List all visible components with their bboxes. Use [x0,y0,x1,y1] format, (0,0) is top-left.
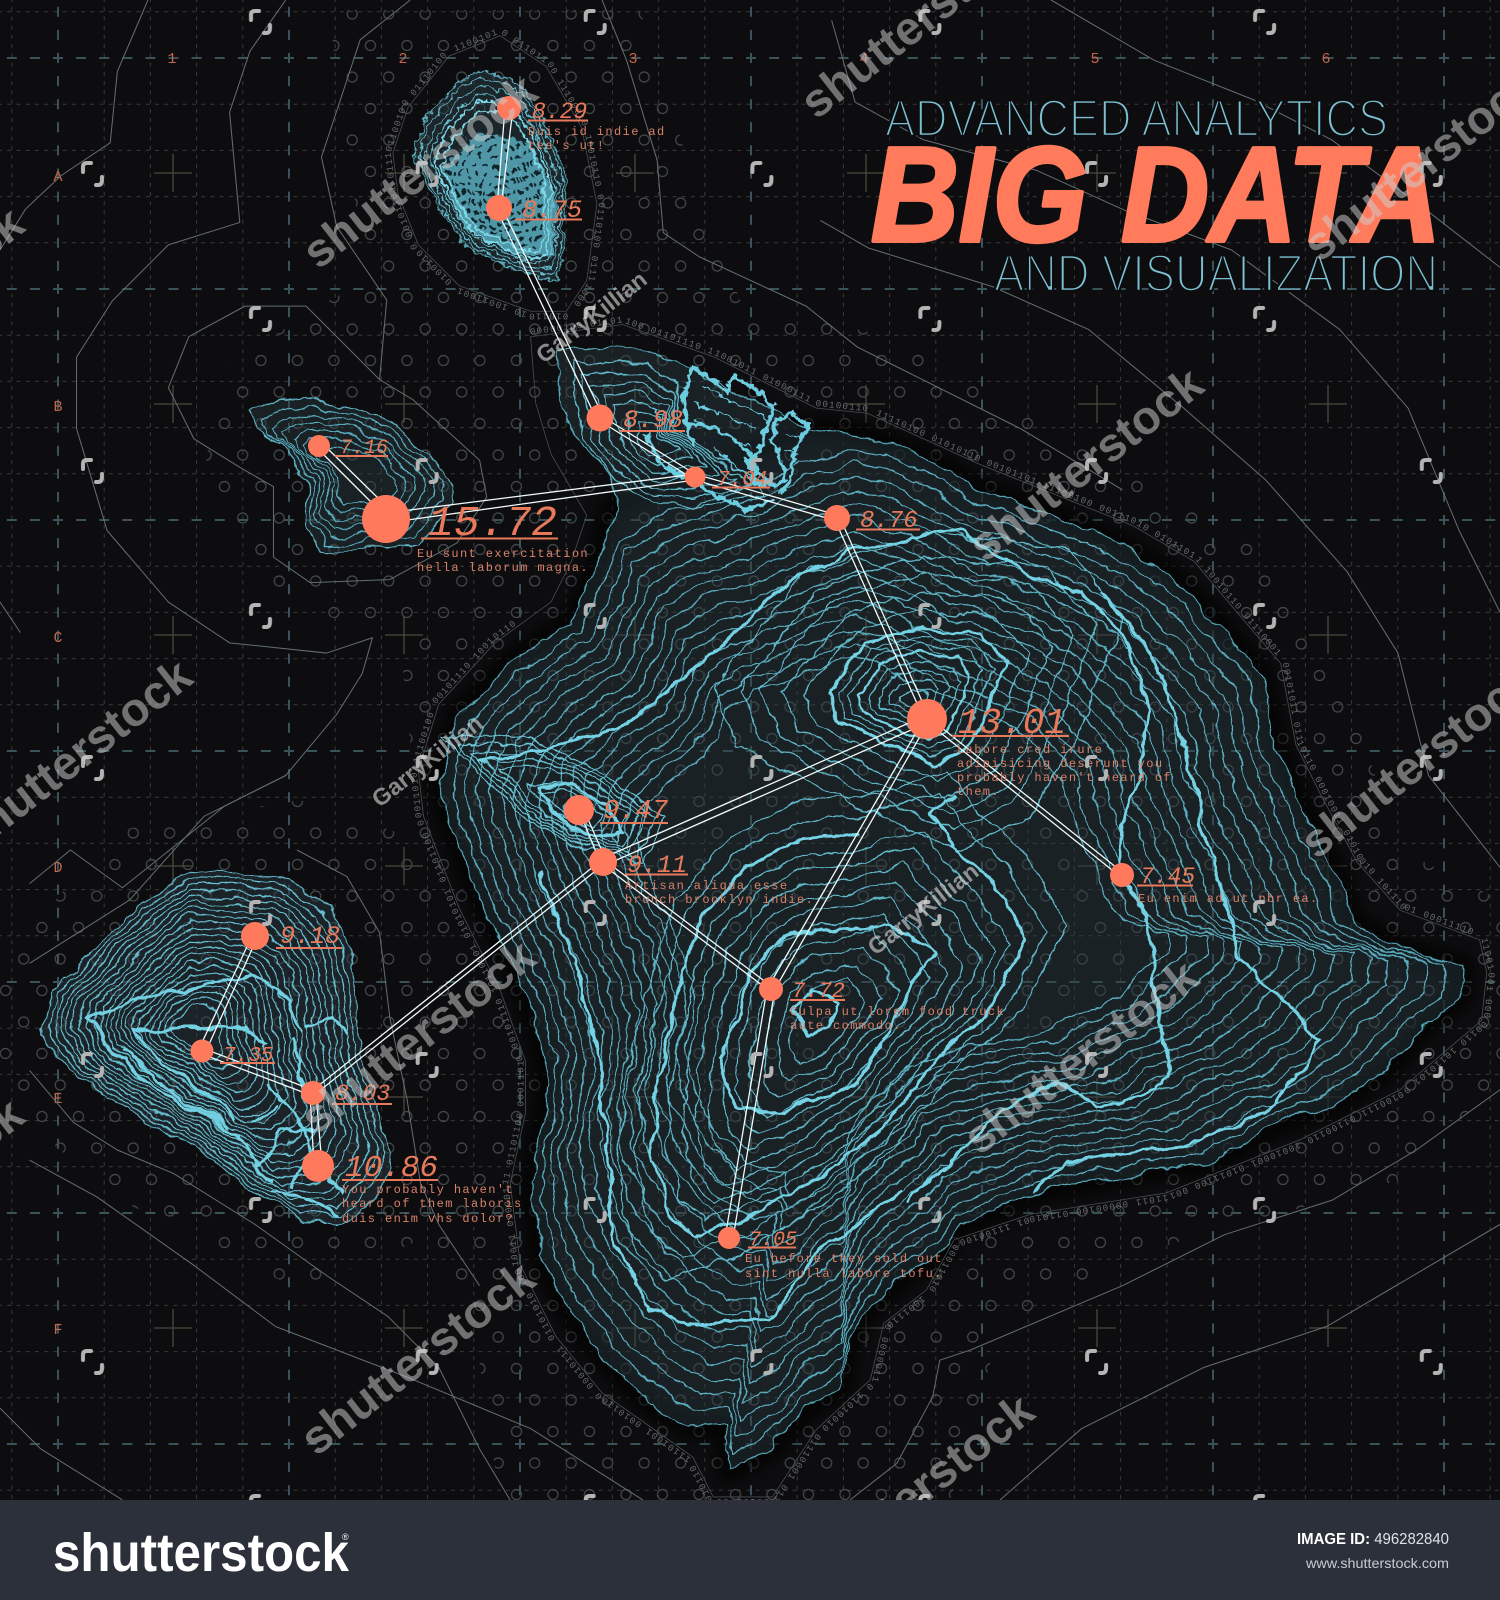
coast-parallel contours [451,448,1444,1453]
summit contours near 13.01 [714,535,1124,852]
north island landmass [413,70,567,280]
label 8.98: 8.98 [623,406,683,435]
label 15.72 [417,499,589,575]
axis labels: rows: C [53,630,63,647]
north island dark flecks [446,117,542,247]
label 8.75: 8.75 [522,196,582,225]
label 9.11: 9.11 [627,851,687,880]
label 7.16: 7.16 [340,437,388,460]
label 7.05: sint nulla labore tofu. [745,1267,943,1281]
watermarks: shutterstock [954,949,1208,1164]
label 7.45 [1137,864,1319,906]
label 7.04: 7.04 [717,469,767,492]
label 7.35: 7.35 [223,1045,274,1068]
watermarks: GarryKillian [367,710,487,812]
axis labels: rows [53,169,63,1339]
axis labels: columns: 4 [859,51,869,68]
axis labels: columns: 6 [1321,51,1331,68]
label 7.45: Eu enim ad ut pbr ea. [1138,892,1319,906]
north island solid cyan core [441,133,556,255]
axis labels: rows: F [53,1322,63,1339]
network links [198,108,1122,1238]
label 7.72: aute commodo. [790,1019,902,1033]
label 9.11: brunch brooklyn indie. [625,893,814,907]
axis labels: columns: 2 [398,51,408,68]
title line: big data: BIG DATA [871,119,1441,270]
label 13.01: probably haven't heard of [957,771,1172,785]
label 8.76: 8.76 [860,508,918,535]
northern ridge, jagged bright contours [647,367,808,510]
binary-code contour: north island [385,30,605,320]
west island index contours [87,974,347,1214]
watermarks: shutterstock [290,1250,545,1465]
label 7.05: 7.05 [749,1229,797,1252]
island: north [413,70,567,280]
network nodes [190,96,1134,1249]
label 7.72 [790,979,1005,1033]
axis labels: columns: 5 [1090,51,1100,68]
dark halo along the main island coast [439,429,1462,1470]
axis labels: rows: B [53,399,63,416]
summit bright ring near 13.01 [858,653,972,741]
island: lanai [250,400,453,552]
label 10.86: 10.86 [345,1151,438,1186]
registered mark: ® [342,1532,349,1542]
label 15.72: 15.72 [428,499,557,548]
label 9.18: 9.18 [280,922,340,951]
axis labels: columns [167,51,1331,68]
label 9.11 [625,851,814,907]
north island upper bright contours [434,100,551,259]
title line: and visualization: AND VISUALIZATION [994,245,1438,303]
label 8.29 [528,99,666,153]
label 10.86: heard of them laboris [342,1197,523,1211]
label 13.01: them. [957,785,1000,799]
watermarks: GarryKillian [531,266,652,368]
footer logo: shutterstock [53,1523,350,1583]
watermarks: shutterstock [293,63,547,278]
label 13.01 [952,703,1172,799]
label 7.05 [745,1229,943,1281]
summit contours near 7.72 [618,772,1067,1280]
label 8.29: tee's ut! [528,139,605,153]
axis labels: columns: 1 [167,51,177,68]
watermarks: shutterstock [959,356,1213,571]
north island outer contours [418,77,564,275]
label 13.01: adipisicing deserunt you [957,757,1163,771]
west island landmass [43,870,392,1222]
island: west [43,870,392,1222]
summit contours near 9.47 [443,737,665,863]
label 7.05: Eu before they sold out [745,1252,943,1266]
axis labels: rows: D [53,860,63,877]
big island landmass [439,345,1462,1470]
watermarks: shutterstock [290,929,545,1144]
label 8.03: 8.03 [335,1081,390,1107]
west island contours [49,877,384,1215]
label 8.29: Duis id indie ad [528,125,666,139]
index contours [480,531,1320,1322]
image id: IMAGE ID: 496282840 [1297,1531,1449,1548]
label 7.72: 7.72 [792,979,845,1004]
label 15.72: hella laborum magna. [417,561,589,575]
binary-code contour: main island: 00000100 01101100 01101110 11001011 01000111 00100110 11110100 01010110 00101101 11100100 00111010 01011011 10010110 01110001 00101011 01110110 00010011 01010010 10111001 00011110 11001001 00000110 10110101 00100111 01100110 10010001 01011100 00111011 00000100 01101001 11100100 00011010 10011100 00000110 11010010 01110001 01100101 00010110 11101001 00101100 00010111 01101010 10010011 01000111 01101100 00011010 00101110 10110001 01010101 01101100 00011010 11100100 00101110 10010110 [410,316,1495,1500]
label 15.72: Eu sunt exercitation [417,547,589,561]
label 10.86 [342,1151,523,1226]
middle island contours [261,407,443,544]
middle island landmass [250,400,453,552]
site url: www.shutterstock.com [1305,1555,1449,1571]
label 9.47: 9.47 [603,797,669,827]
watermarks: GarryKillian [863,858,983,960]
label 10.86: You probably haven't [342,1183,514,1197]
ridge fine lines [653,388,801,480]
label 13.01: 13.01 [958,703,1066,744]
label 13.01: Labore cred irure [957,743,1103,757]
watermarks: shutterstock [789,1383,1044,1598]
label 9.11: Artisan aliqua esse [625,879,788,893]
axis labels: columns: 3 [628,51,638,68]
axis labels: rows: E [53,1091,63,1108]
title line: advanced analytics: ADVANCED ANALYTICS [885,90,1388,148]
footer bar [0,1500,1500,1600]
label 7.45: 7.45 [1140,864,1195,890]
label 10.86: duis enim vhs dolor? [342,1212,514,1226]
label 7.72: Culpa ut lorem food truck [790,1005,1005,1019]
title [871,90,1441,303]
ridge thick lines [647,367,808,510]
northern shield contours [570,364,766,504]
axis labels: rows: A [53,169,63,186]
label 8.29: 8.29 [532,99,587,125]
island: big island contours [439,345,1462,1470]
